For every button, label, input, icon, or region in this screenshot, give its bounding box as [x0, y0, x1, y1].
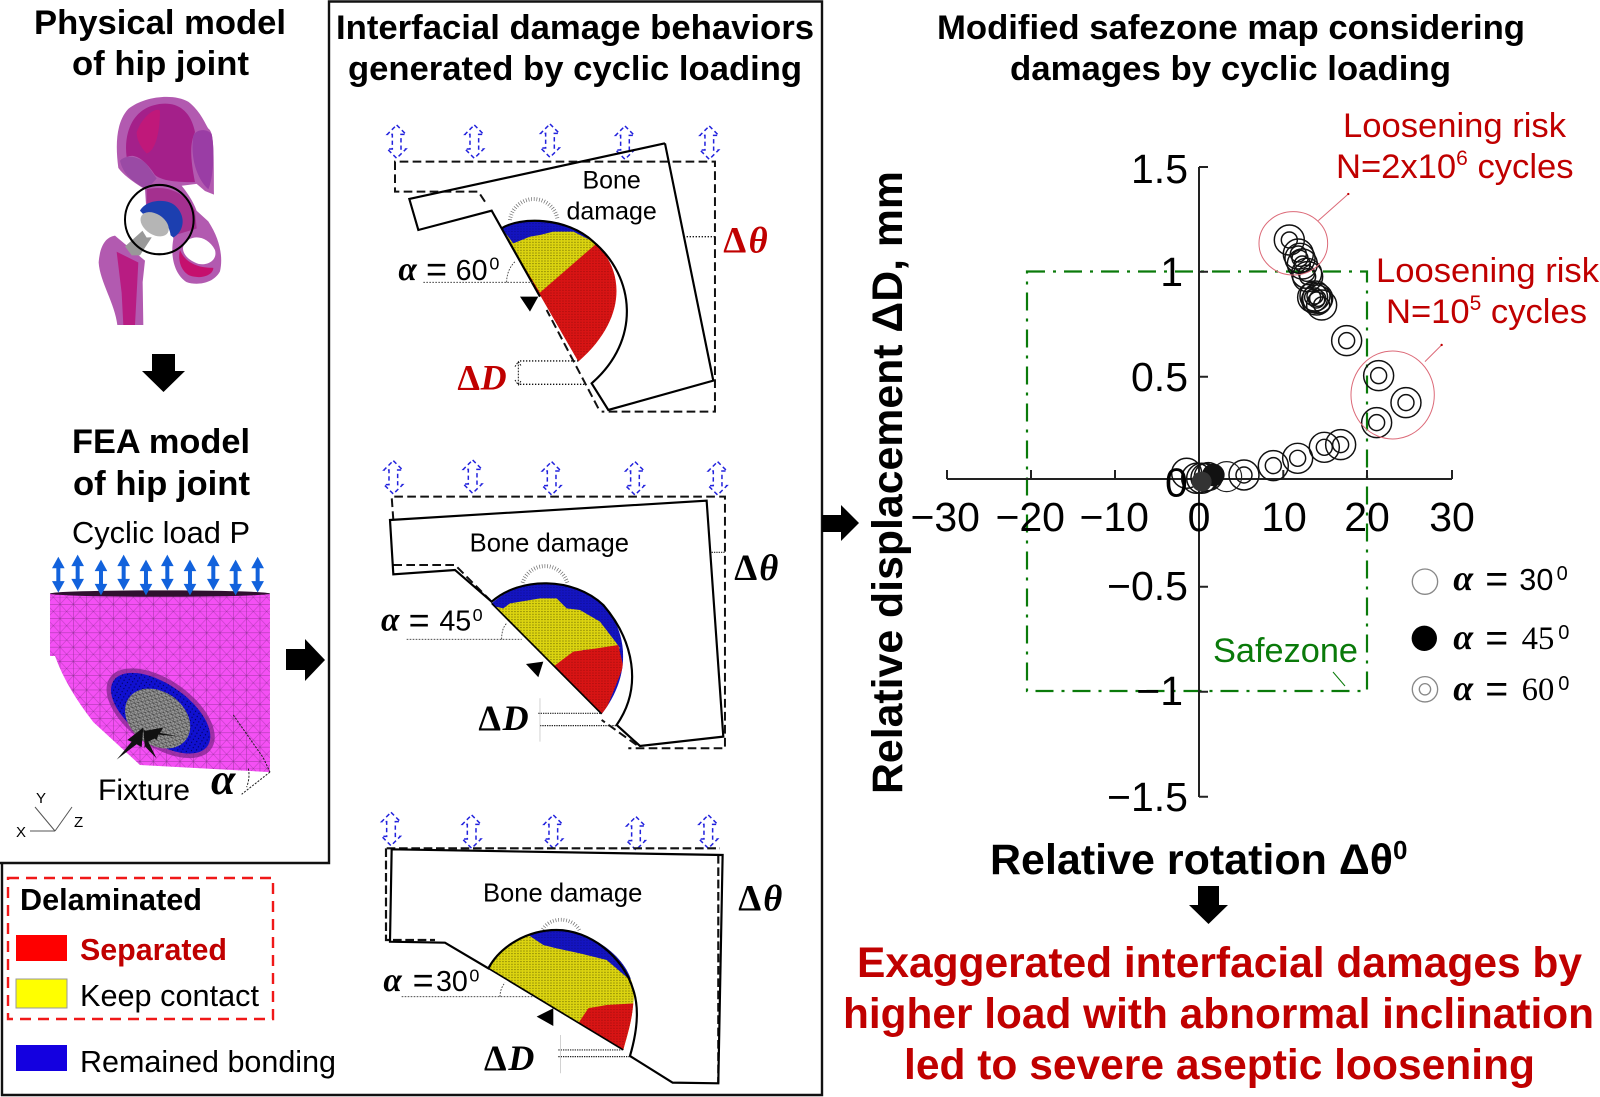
axis title: x: 0	[1393, 835, 1407, 865]
y tick labels: −1.5	[1107, 774, 1188, 820]
callout: loosening 10^5	[1376, 252, 1600, 331]
diagram: alpha 45	[381, 460, 778, 748]
legend: alpha symbols: 45	[1522, 621, 1554, 657]
heading: physical model: of hip joint	[72, 45, 250, 83]
FEA mesh model	[50, 590, 270, 794]
scatter points	[1165, 225, 1421, 506]
diagram: alpha 30: =	[413, 960, 434, 1001]
icon: coordinate axes: X	[16, 824, 26, 841]
legend: alpha symbols: α	[1453, 617, 1474, 657]
diagram: alpha 60: damage	[566, 197, 657, 225]
legend: alpha symbols: =	[1485, 616, 1508, 660]
diagram: alpha 30: 30	[436, 966, 468, 998]
diagram: alpha 45: D	[502, 698, 529, 738]
diagram: alpha 45: Δ	[478, 698, 501, 738]
icon: cyclic load arrows	[52, 555, 264, 595]
icon: hip joint illustration	[99, 97, 221, 325]
icon: coordinate axes: Y	[36, 790, 46, 807]
panel frames	[0, 2, 822, 1095]
arrow: map to conclusion	[1189, 886, 1228, 924]
diagram: alpha 30: α	[383, 962, 402, 999]
label: fixture: Fixture	[98, 774, 190, 807]
diagram: alpha 45: 0	[473, 605, 483, 625]
axis title: x: Relative rotation Δθ	[990, 836, 1393, 884]
legend: alpha symbols: 0	[1558, 622, 1569, 644]
callout: loosening 10^5: 5	[1470, 292, 1481, 315]
chart: safezone scatter	[910, 146, 1475, 820]
loosening risk circles	[1259, 193, 1442, 439]
heading: interfacial damage: Interfacial damage behaviors	[336, 9, 814, 47]
callout: loosening 2x10^6: cycles	[1468, 148, 1574, 186]
heading: safezone map: Modified safezone map considering	[937, 9, 1525, 47]
x tick labels: −20	[995, 494, 1065, 540]
x tick labels: −30	[910, 494, 980, 540]
legend: alpha symbols: =	[1485, 667, 1508, 711]
axes	[947, 167, 1452, 797]
diagram: alpha 45: Bone damage	[470, 530, 629, 558]
diagram: alpha 60: 60	[456, 255, 488, 287]
legend: alpha symbols	[1412, 557, 1569, 711]
callout: loosening 2x10^6: 6	[1456, 147, 1468, 170]
heading: physical model	[34, 4, 286, 83]
label: safezone: Safezone	[1213, 632, 1358, 670]
heading: FEA model	[72, 423, 251, 503]
icon: coordinate axes	[16, 790, 83, 841]
label: alpha angle: α	[211, 755, 236, 804]
diagram: alpha 60	[387, 124, 768, 412]
y tick labels: 1	[1160, 249, 1183, 295]
scatter points: 0	[1165, 460, 1188, 506]
safezone rectangle	[1027, 272, 1367, 691]
x tick labels: 0	[1188, 494, 1210, 540]
diagram: alpha 45: =	[409, 599, 430, 640]
heading: FEA model: of hip joint	[73, 465, 251, 503]
conclusion text: led to severe aseptic loosening	[904, 1042, 1535, 1089]
diagram: alpha 60: α	[398, 251, 417, 288]
diagram: alpha 60: θ	[749, 220, 768, 261]
legend: delamination: Keep contact	[80, 979, 260, 1013]
y tick labels: 1.5	[1131, 146, 1188, 192]
label: cyclic load: Cyclic load P	[72, 515, 250, 550]
diagram: alpha 30: Δ	[484, 1038, 507, 1078]
legend: alpha symbols: 0	[1558, 673, 1569, 695]
heading: safezone map: damages by cyclic loading	[1010, 50, 1451, 88]
heading: physical model: Physical model	[34, 4, 286, 42]
diagram: alpha 30: 0	[469, 965, 479, 985]
heading: safezone map	[937, 9, 1525, 88]
y tick labels	[1107, 146, 1188, 820]
x tick labels: 30	[1429, 494, 1475, 540]
callout: loosening 2x10^6	[1336, 107, 1574, 186]
legend: alpha symbols: α	[1453, 558, 1474, 598]
diagram: alpha 45: 45	[439, 606, 471, 638]
legend: alpha symbols: 0	[1557, 563, 1568, 585]
diagram: alpha 30: D	[507, 1038, 534, 1078]
x tick labels: 10	[1261, 494, 1307, 540]
diagram: alpha 30	[382, 812, 782, 1083]
callout: loosening 2x10^6: N=2x10	[1336, 148, 1456, 186]
diagram: alpha 45: θ	[759, 547, 778, 588]
diagram: alpha 45: α	[381, 602, 400, 639]
icon: coordinate axes: Z	[74, 814, 83, 831]
diagram: alpha 30: Δ	[738, 878, 761, 919]
diagram: alpha 30: θ	[763, 878, 782, 919]
arrow: FEA to damage	[286, 639, 325, 681]
legend: alpha symbols: α	[1453, 668, 1474, 708]
legend: alpha symbols: 60	[1522, 672, 1554, 708]
conclusion text: higher load with abnormal inclination	[843, 991, 1594, 1038]
diagram: alpha 60: Bone	[582, 166, 641, 194]
diagram: alpha 45: Δ	[734, 547, 757, 588]
y tick labels: 0.5	[1131, 354, 1188, 400]
x tick labels: −10	[1079, 494, 1149, 540]
legend: alpha symbols: 30	[1519, 563, 1553, 597]
legend: alpha symbols: =	[1485, 557, 1508, 601]
legend: delamination: Delaminated	[20, 883, 202, 917]
legend: delamination	[8, 878, 336, 1079]
legend: delamination: Remained bonding	[80, 1045, 336, 1079]
x tick labels: 20	[1344, 494, 1390, 540]
diagram: alpha 60: Δ	[457, 357, 480, 397]
y tick labels: −0.5	[1107, 563, 1188, 609]
diagram: alpha 60: D	[480, 357, 507, 397]
heading: interfacial damage: generated by cyclic loading	[348, 50, 802, 88]
axis title: y: Relative displacement ΔD, mm	[864, 171, 912, 794]
callout: loosening 10^5: Loosening risk	[1376, 252, 1600, 290]
diagram: alpha 30: Bone damage	[483, 880, 642, 908]
y tick labels: −1	[1136, 668, 1183, 714]
heading: interfacial damage	[336, 9, 814, 88]
diagram: alpha 60: =	[426, 249, 447, 290]
x tick labels	[910, 494, 1475, 540]
callout: loosening 10^5: cycles	[1481, 293, 1587, 331]
diagram: alpha 60: 0	[489, 253, 499, 273]
arrow: damage to safezone map	[822, 505, 859, 541]
conclusion text	[843, 940, 1594, 1089]
arrow: down from physical to FEA	[142, 354, 185, 392]
diagram: alpha 60: Δ	[723, 220, 746, 261]
callout: loosening 10^5: N=10	[1386, 293, 1470, 331]
callout: loosening 2x10^6: Loosening risk	[1343, 107, 1567, 145]
heading: FEA model: FEA model	[72, 423, 250, 461]
conclusion text: Exaggerated interfacial damages by	[857, 940, 1582, 987]
legend: delamination: Separated	[80, 933, 227, 967]
